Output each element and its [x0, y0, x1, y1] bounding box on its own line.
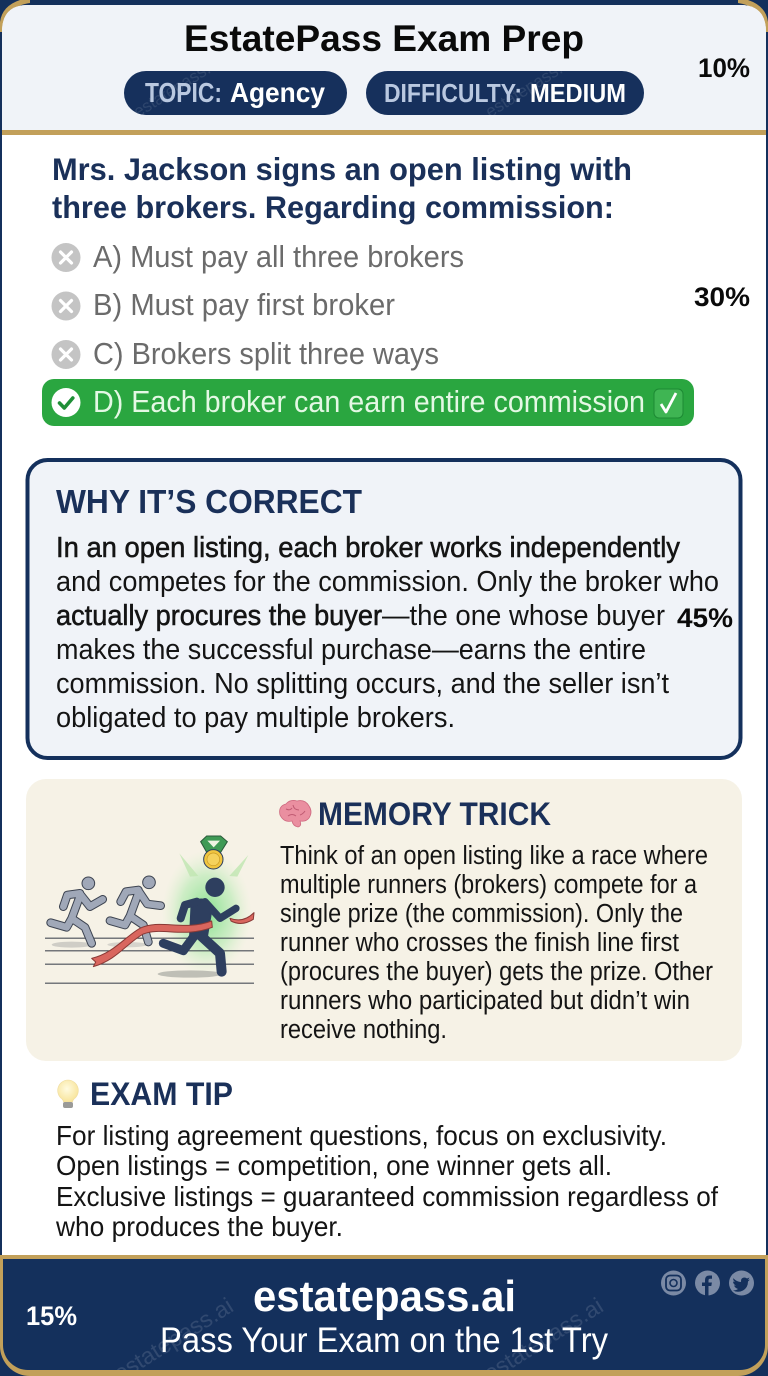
option C: C) Brokers split three ways — [93, 337, 439, 371]
topic pill: Agency — [230, 77, 326, 108]
icon: twitter — [729, 1270, 754, 1296]
icon: facebook — [695, 1270, 720, 1296]
explanation text: obligated to pay multiple brokers. — [56, 702, 455, 734]
icon: winning runner — [163, 878, 236, 972]
question: three brokers. Regarding commission: — [52, 189, 614, 225]
difficulty pill: estatepass.ai — [482, 52, 577, 121]
tip text: For listing agreement questions, focus on exclusivity. — [56, 1120, 667, 1151]
tip text — [55, 1120, 718, 1242]
memory trick text: (procures the buyer) gets the prize. Other — [280, 958, 713, 986]
percent label 10%: 10% — [698, 53, 750, 83]
icon: medal — [179, 836, 248, 877]
difficulty pill: DIFFICULTY: — [384, 78, 522, 108]
question: Mrs. Jackson signs an open listing with — [52, 151, 632, 187]
illustration: runners at finish line — [45, 836, 254, 984]
explanation text — [56, 532, 719, 734]
icon: finish ribbon — [92, 913, 254, 967]
option D correct: D) Each broker can earn entire commission — [93, 385, 645, 419]
topic pill: estatepass.ai — [130, 52, 225, 121]
memory trick text: runner who crosses the finish line first — [280, 929, 679, 957]
option A: A) Must pay all three brokers — [93, 240, 464, 274]
explanation text: commission. No splitting occurs, and the seller isn’t — [56, 668, 669, 700]
option B: B) Must pay first broker — [93, 288, 395, 322]
explanation text: and competes for the commission. Only the broker who — [56, 566, 719, 598]
heading: WHY IT’S CORRECT — [56, 484, 362, 521]
question — [52, 151, 632, 225]
explanation text: actually procures the buyer — [56, 600, 382, 632]
icon: light bulb — [58, 1080, 78, 1108]
explanation text: makes the successful purchase—earns the entire — [56, 634, 646, 666]
heading: MEMORY TRICK — [318, 796, 551, 832]
explanation text: In an open listing, each broker works independently — [56, 532, 681, 564]
icon: brain — [280, 800, 311, 827]
title: EstatePass Exam Prep — [184, 18, 584, 59]
footer — [0, 1255, 768, 1376]
topic pill — [124, 71, 347, 115]
percent label 45%: 45% — [677, 603, 733, 633]
header band — [2, 5, 766, 135]
memory trick text: multiple runners (brokers) compete for a — [280, 871, 698, 899]
heading: EXAM TIP — [90, 1076, 233, 1112]
panel: exam tip — [55, 1076, 718, 1242]
percent label 30%: 30% — [694, 282, 750, 312]
icon: grey runner 1 — [51, 877, 103, 943]
panel: memory trick — [26, 779, 742, 1061]
tagline: Pass Your Exam on the 1st Try — [160, 1321, 608, 1360]
panel: why it's correct — [28, 460, 740, 758]
memory trick text: runners who participated but didn’t win — [280, 987, 690, 1015]
option D correct — [42, 379, 694, 426]
tip text: Open listings = competition, one winner gets all. — [56, 1150, 612, 1181]
memory trick text: receive nothing. — [280, 1016, 447, 1044]
icon: instagram — [661, 1270, 686, 1296]
tip text: Exclusive listings = guaranteed commission regardless of — [56, 1181, 718, 1212]
topic pill: TOPIC: — [145, 77, 222, 108]
icon: check mark box — [654, 389, 683, 418]
explanation text: —the one whose buyer — [382, 600, 665, 632]
difficulty pill — [366, 71, 644, 115]
memory trick text — [280, 842, 713, 1044]
memory trick text: single prize (the commission). Only the — [280, 900, 683, 928]
memory trick text: Think of an open listing like a race where — [280, 842, 708, 870]
icon: grey runner 2 — [110, 876, 161, 942]
tip text: who produces the buyer. — [55, 1211, 343, 1242]
difficulty pill: MEDIUM — [530, 78, 626, 108]
percent label 15%: 15% — [26, 1301, 77, 1331]
brand name: estatepass.ai — [253, 1272, 516, 1321]
